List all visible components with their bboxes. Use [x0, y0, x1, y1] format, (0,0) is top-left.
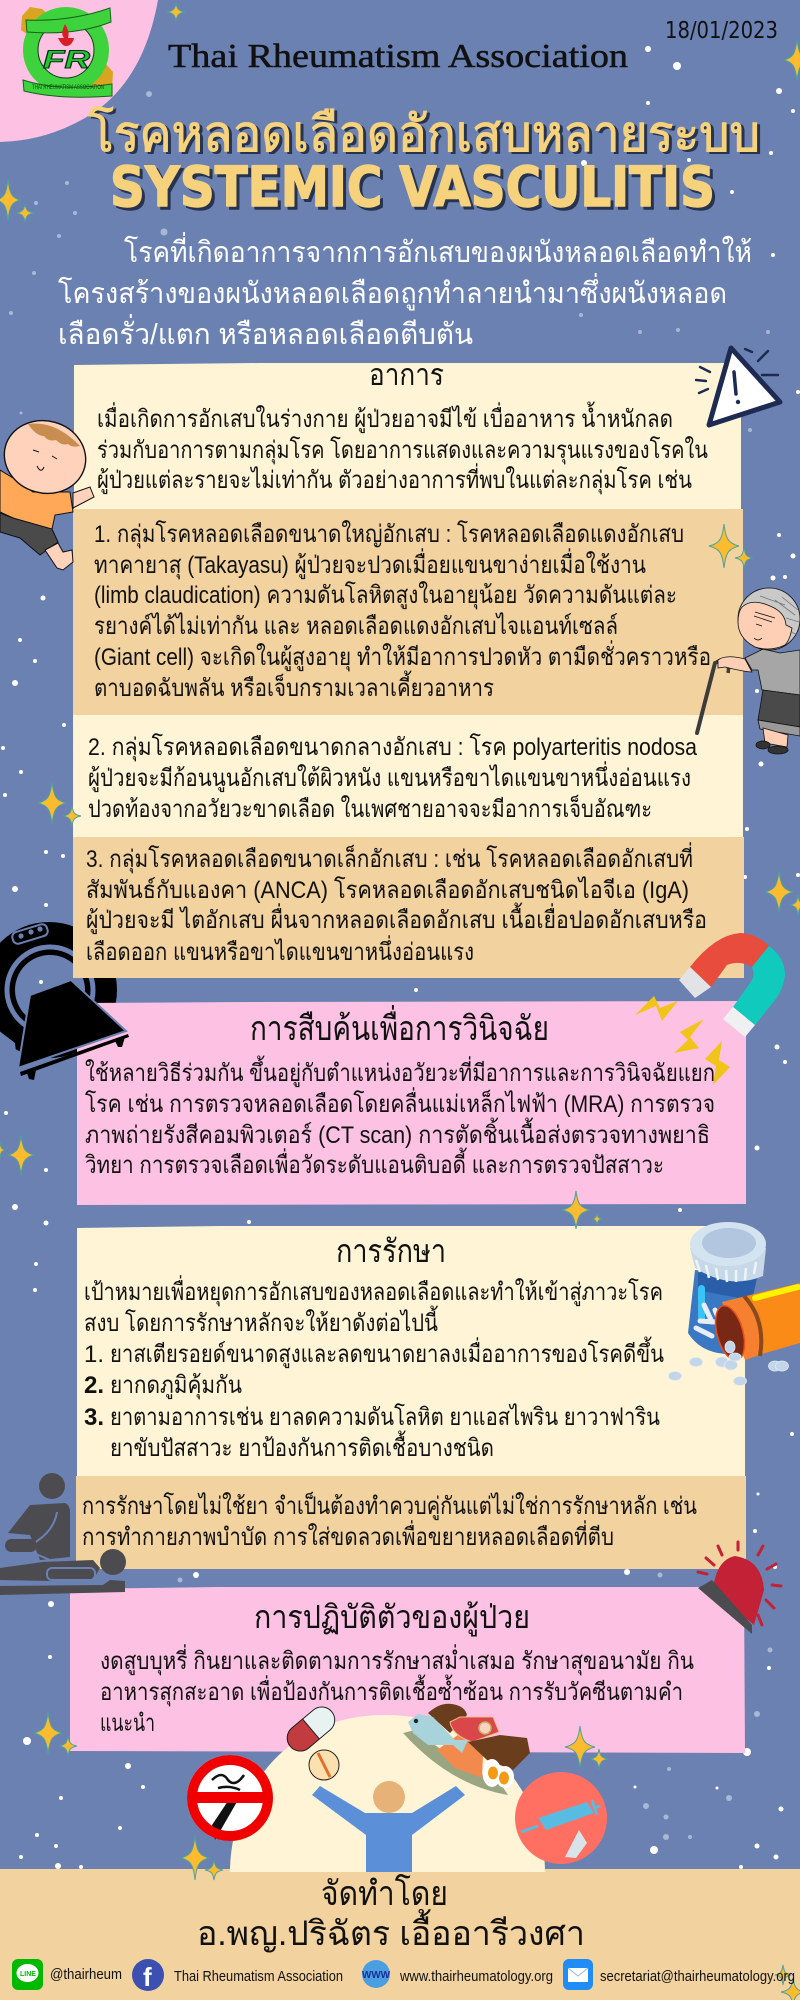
icon: warning triangle — [696, 348, 780, 425]
panel: symptoms intro: เมื่อเกิดการอักเสบในร่างกาย ผู้ป่วยอาจมีไข้ เบื่ออาหาร น้ำหนักลด — [97, 401, 673, 434]
icon: mail — [563, 1959, 593, 1990]
association name: Thai Rheumatism Association — [168, 38, 628, 75]
panel: non-drug treatment: การทำกายภาพบำบัด การใส่ขดลวดเพื่อขยายหลอดเลือดที่ตีบ — [82, 1520, 614, 1551]
panel: small vessel group: ผู้ป่วยจะมี ไตอักเสบ ผื่นจากหลอดเลือดอักเสบ เนื้อเยื่อปอดอักเสบหรือ — [86, 902, 707, 935]
introduction text: เลือดรั่ว/แตก หรือหลอดเลือดตีบตัน — [58, 314, 473, 351]
icon: MRI scanner ring — [0, 922, 117, 1100]
contact row: @thairheum — [50, 1966, 122, 1983]
panel: small vessel group: 3. กลุ่มโรคหลอดเลือดขนาดเล็กอักเสบ : เช่น โรคหลอดเลือดอักเสบที่ — [86, 842, 693, 874]
footer credit — [197, 1874, 585, 1953]
icon: siren — [698, 1542, 781, 1634]
icon: food plate — [403, 1704, 530, 1795]
panel: large vessel group: (limb claudication) ความดันโลหิตสูงในอายุน้อย วัดความดันแต่ละ — [94, 581, 677, 610]
title — [88, 106, 763, 222]
panel: investigations: ภาพถ่ายรังสีคอมพิวเตอร์ (CT scan) การตัดชิ้นเนื้อส่งตรวจทางพยาธิ — [85, 1117, 710, 1149]
panel: investigations: โรค เช่น การตรวจหลอดเลือดโดยคลื่นแม่เหล็กไฟฟ้า (MRA) การตรวจ — [85, 1087, 715, 1118]
introduction text — [58, 232, 752, 351]
panel: treatment: 2. — [84, 1372, 104, 1399]
title: โรคหลอดเลือดอักเสบหลายระบบ — [91, 108, 763, 164]
panel: non-drug treatment: การรักษาโดยไม่ใช้ยา จำเป็นต้องทำควบคู่กันแต่ไม่ใช่การรักษาหลัก เช่น — [82, 1491, 697, 1521]
icon: MRI scanner table — [18, 980, 129, 1080]
introduction text: โรคที่เกิดอาการจากการอักเสบของผนังหลอดเลือดทำให้ — [124, 232, 752, 269]
panel: treatment: 1. — [84, 1341, 104, 1368]
panel: large vessel group: ตาบอดฉับพลัน หรือเจ็บกรามเวลาเคี้ยวอาหาร — [94, 670, 494, 702]
icon: no smoking — [187, 1755, 273, 1841]
character: boy — [0, 412, 94, 570]
contact row — [12, 1959, 795, 1992]
panel: non-drug treatment — [76, 1476, 746, 1569]
panel: small vessel group: เลือดออก แขนหรือขาไดแขนขาหนึ่งอ่อนแรง — [86, 935, 474, 966]
logo: Thai Rheumatism Association — [21, 7, 113, 97]
panel: symptoms intro: ผู้ป่วยแต่ละรายจะไม่เท่ากัน ตัวอย่างอาการที่พบในแต่ละกลุ่มโรค เช่น — [97, 463, 692, 495]
character: old woman with cane — [697, 588, 800, 754]
contact row: www.thairheumatology.org — [399, 1968, 553, 1985]
title: โรคหลอดเลือดอักเสบหลายระบบ — [88, 106, 760, 162]
panel: treatment: สงบ โดยการรักษาหลักจะให้ยาดังต่อไปนี้ — [84, 1305, 438, 1337]
icon: LINE: LINE — [20, 1971, 36, 1978]
panel: treatment: 3. — [84, 1404, 104, 1431]
panel: treatment: ยาตามอาการเช่น ยาลดความดันโลหิต ยาแอสไพริน ยาวาฟาริน — [110, 1403, 660, 1431]
date: 18/01/2023 — [665, 18, 778, 44]
title: SYSTEMIC VASCULITIS — [110, 155, 715, 219]
panel: small vessel group — [73, 837, 744, 978]
panel: investigations: การสืบค้นเพื่อการวินิจฉัย — [250, 1005, 549, 1048]
logo: Thai Rheumatism Association: FR — [43, 46, 90, 74]
panel: medium vessel group: 2. กลุ่มโรคหลอดเลือดขนาดกลางอักเสบ : โรค polyarteritis nodosa — [88, 733, 698, 762]
panel: medium vessel group: ผู้ป่วยจะมีก้อนนูนอักเสบใต้ผิวหนัง แขนหรือขาไดแขนขาหนึ่งอ่อนแรง — [88, 761, 691, 793]
panel: patient self-care — [70, 1587, 745, 1753]
panel: medium vessel group — [73, 715, 743, 837]
panel: medium vessel group: ปวดท้องจากอวัยวะขาดเลือด ในเพศชายอาจจะมีอาการเจ็บอัณฑะ — [88, 794, 652, 823]
icon: tablet — [309, 1750, 339, 1780]
panel: large vessel group: ทาคายาสุ (Takayasu) ผู้ป่วยจะปวดเมื่อยแขนขาง่ายเมื่อใช้งาน — [94, 548, 646, 580]
contact row: Thai Rheumatism Association — [174, 1968, 343, 1985]
icon: magnet with sparks — [635, 933, 785, 1085]
icon: pill bottles — [668, 1222, 800, 1386]
icon: website globe: WWW — [362, 1970, 391, 1981]
icon: LINE — [12, 1959, 43, 1990]
illustration: healthy living dome — [187, 1702, 607, 1872]
icon: physical therapy — [0, 1473, 126, 1595]
panel: patient self-care: อาหารสุกสะอาด เพื่อป้องกันการติดเชื้อซ้ำซ้อน การรับวัคซีนตามคำ — [100, 1674, 683, 1707]
panel: large vessel group: (Giant cell) จะเกิดในผู้สูงอายุ ทำให้มีอาการปวดหัว ตามืดชั่วคราวหรือ — [94, 640, 711, 672]
panel: treatment: การรักษา — [336, 1233, 446, 1269]
panel: investigations: วิทยา การตรวจเลือดเพื่อวัดระดับแอนติบอดี้ และการตรวจปัสสาวะ — [85, 1147, 664, 1179]
panel: symptoms intro — [74, 359, 741, 509]
panel: treatment: เป้าหมายเพื่อหยุดการอักเสบของหลอดเลือดและทำให้เข้าสู่ภาวะโรค — [84, 1275, 663, 1307]
panel: patient self-care: แนะนำ — [100, 1710, 155, 1737]
icon: Facebook: f — [143, 1962, 152, 1992]
panel: patient self-care: งดสูบบุหรี่ กินยาและติดตามการรักษาสม่ำเสมอ รักษาสุขอนามัย กิน — [100, 1644, 694, 1676]
icon: Facebook — [132, 1959, 164, 1992]
panel: symptoms intro: อาการ — [369, 359, 444, 392]
icon: website globe — [362, 1960, 391, 1988]
panel: treatment: ยากดภูมิคุ้มกัน — [110, 1372, 242, 1400]
icon: vaccine syringe — [515, 1772, 607, 1864]
person with raised arms — [312, 1781, 465, 1872]
logo: Thai Rheumatism Association: THAI RHEUMATISM ASSOCIATION — [32, 85, 104, 91]
panel: large vessel group — [73, 509, 743, 715]
panel: treatment — [77, 1226, 745, 1476]
introduction text: โครงสร้างของผนังหลอดเลือดถูกทำลายนำมาซึ่งผนังหลอด — [58, 273, 727, 311]
footer credit: จัดทำโดย — [321, 1874, 448, 1913]
panel: treatment: ยาขับปัสสาวะ ยาป้องกันการติดเชื้อบางชนิด — [110, 1430, 494, 1462]
footer credit: อ.พญ.ปริฉัตร เอื้ออารีวงศา — [197, 1909, 585, 1953]
panel: patient self-care: การปฏิบัติตัวของผู้ป่วย — [254, 1599, 530, 1637]
title: SYSTEMIC VASCULITIS — [113, 158, 718, 222]
panel: large vessel group: 1. กลุ่มโรคหลอดเลือดขนาดใหญ่อักเสบ : โรคหลอดเลือดแดงอักเสบ — [94, 520, 684, 549]
footer band — [0, 1869, 800, 2000]
panel: small vessel group: สัมพันธ์กับแองคา (ANCA) โรคหลอดเลือดอักเสบชนิดไอจีเอ (IgA) — [86, 876, 689, 904]
pink corner blob — [0, 0, 158, 142]
icon: capsule — [282, 1702, 340, 1756]
panel: large vessel group: รยางค์ได้ไม่เท่ากัน และ หลอดเลือดแดงอักเสบไจแอนท์เซลล์ — [94, 612, 618, 640]
panel: investigations — [77, 1001, 746, 1205]
panel: treatment: ยาสเตียรอยด์ขนาดสูงและลดขนาดยาลงเมื่ออาการของโรคดีขึ้น — [110, 1336, 664, 1369]
